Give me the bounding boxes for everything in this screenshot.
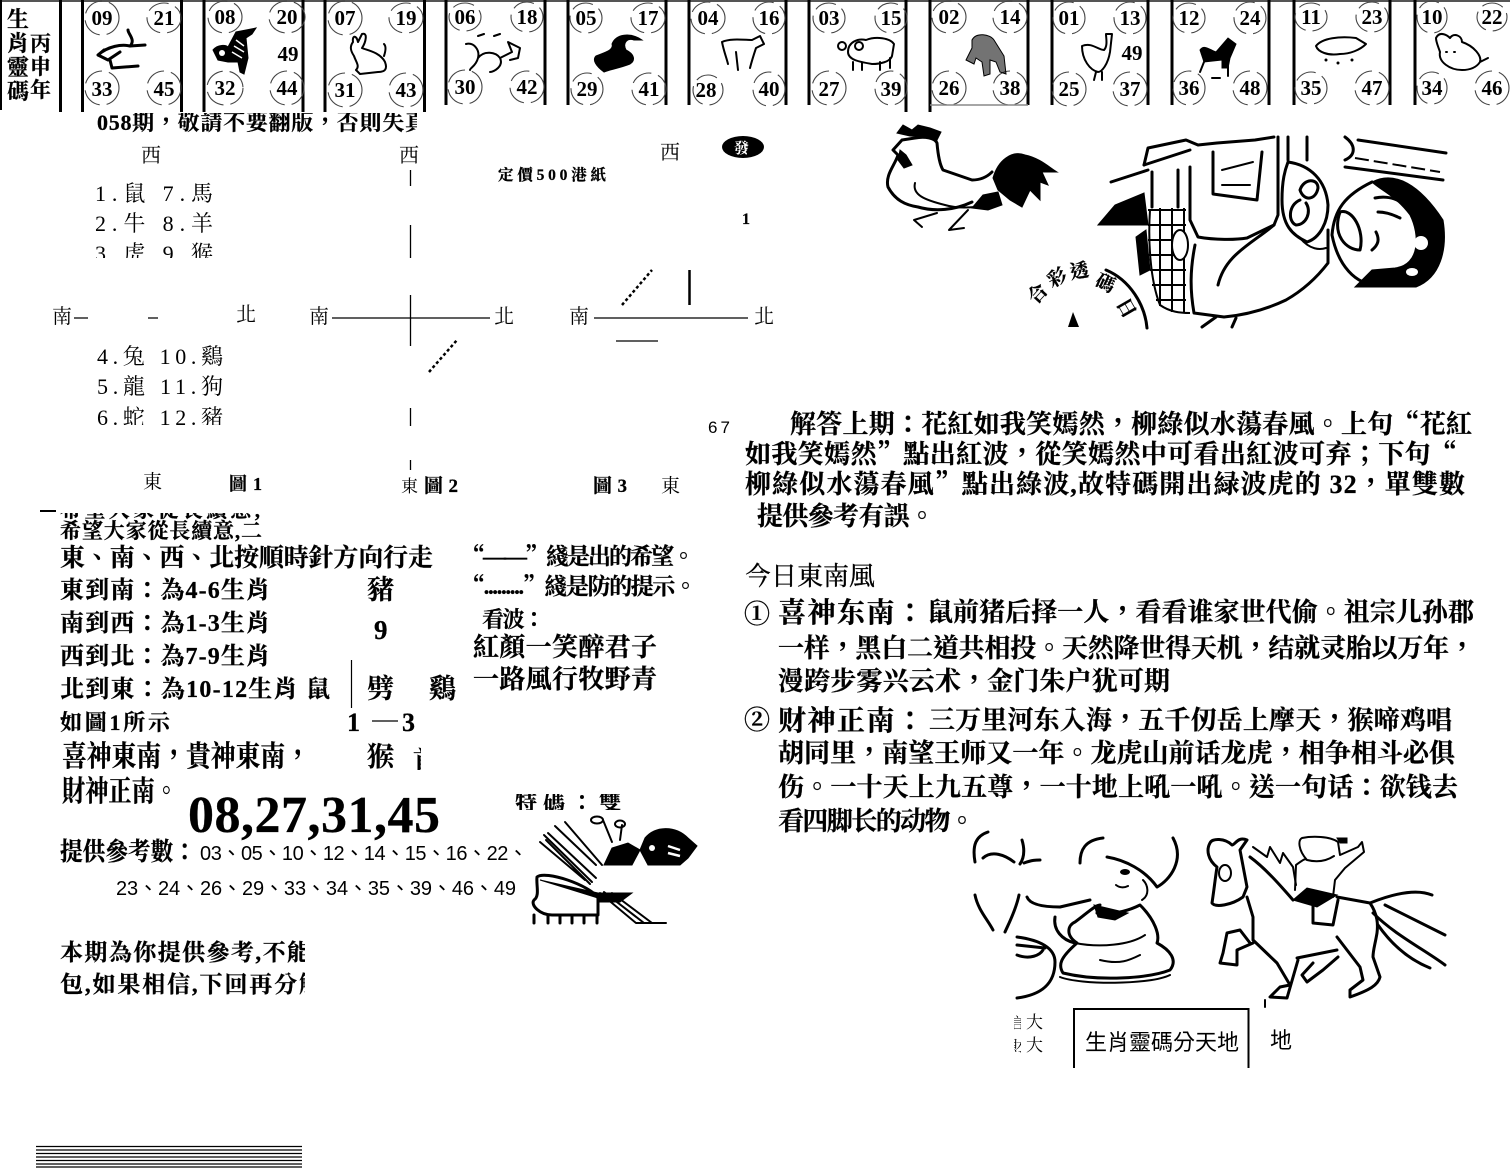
text block: wealth god south bbox=[744, 705, 1459, 836]
reference numbers: 23、24、26、29、33、34、35、39、46、49 bbox=[116, 878, 516, 900]
list: zodiac numbers upper: 1.鼠 7.馬 bbox=[95, 181, 213, 206]
closing note bbox=[60, 940, 322, 997]
icon: tiger bbox=[213, 28, 256, 74]
panel: horse 04: 28 bbox=[696, 78, 716, 102]
diagram: compass figures: 西 bbox=[660, 141, 680, 164]
title box: 生肖靈碼分天地 bbox=[1085, 1030, 1239, 1055]
list: zodiac numbers lower: 5.龍 11.狗 bbox=[97, 374, 223, 399]
list: zodiac numbers lower bbox=[97, 344, 223, 430]
legend: line meaning: “.........”綫是防的提示。 bbox=[462, 568, 697, 601]
diagram: compass figures bbox=[52, 141, 774, 497]
illustration: upside-down boy bbox=[1098, 137, 1446, 327]
reference numbers bbox=[60, 838, 528, 900]
panel: rooster 01: 25 bbox=[1058, 77, 1080, 101]
special code label: 特碼：雙 bbox=[515, 790, 621, 815]
text block: colour wave poem: 紅顏一笑醉君子 bbox=[473, 633, 657, 662]
fragments: side captions: 言 bbox=[1010, 1015, 1025, 1032]
diagram: compass figures: 北 bbox=[236, 303, 256, 326]
diagram: compass figures: 東 bbox=[661, 475, 680, 497]
panel: pig 11: 11 bbox=[1301, 5, 1321, 29]
text block: direction rules bbox=[60, 543, 433, 808]
panel: rat-row 09: 33 bbox=[92, 77, 112, 101]
list: zodiac numbers upper bbox=[96, 182, 212, 258]
icon: dog bbox=[1200, 38, 1236, 68]
panel: rat-row 09: 45 bbox=[154, 77, 174, 101]
panel: zodiac title: 生 bbox=[7, 7, 29, 32]
panel: dragon 06: 30 bbox=[454, 75, 476, 99]
text block: wealth god south: ② bbox=[744, 706, 770, 735]
text block: colour wave poem: 一路風行牧野青 bbox=[473, 665, 657, 694]
text block: last issue answer bbox=[745, 404, 1472, 531]
legend: line meaning: “——”綫是出的希望。 bbox=[462, 538, 695, 571]
text block: direction rules: 北到東：為10-12生肖 鼠 bbox=[60, 676, 330, 703]
text block: last issue answer: 提供參考有誤。 bbox=[757, 501, 935, 531]
panel: rooster 01 bbox=[1052, 0, 1148, 106]
panel: rabbit 07: 43 bbox=[396, 78, 416, 102]
text block: fortune god southeast bbox=[744, 597, 1475, 696]
text block: wealth god south: 财神正南： bbox=[778, 705, 924, 737]
panel: tiger 08 bbox=[204, 0, 305, 112]
panel: snake 05: 17 bbox=[638, 6, 658, 30]
text block: wealth god south: 三万里河东入海，五千仞岳上摩天，猴啼鸡唱 bbox=[929, 705, 1452, 735]
diagram: compass figures: 南 bbox=[52, 305, 72, 328]
icon: hen bbox=[1082, 34, 1112, 80]
text block: wealth god south: 看四脚长的动物。 bbox=[778, 806, 975, 836]
panel: tiger 08: 20 bbox=[276, 5, 298, 29]
fragments: side captions bbox=[1014, 1013, 1042, 1052]
icon: rabbit bbox=[351, 34, 386, 74]
list: zodiac numbers lower: 4.兔 10.鷄 bbox=[97, 344, 223, 369]
panel: rat-row 09: 09 bbox=[92, 6, 112, 30]
text block: wealth god south: 胡同里，南望王师又一年。龙虎山前话龙虎，相争相斗必俱 bbox=[778, 738, 1456, 768]
diagram: compass figures: 西 bbox=[399, 144, 419, 167]
text block: fortune god southeast: 漫跨步雾兴云术，金门朱户犹可期 bbox=[778, 667, 1170, 696]
illustration: drinking boy bbox=[974, 832, 1177, 998]
diagram: zodiac cross: 劈 bbox=[367, 674, 394, 704]
text block: last issue answer: 柳綠似水蕩春風”點出綠波,故特碼開出緑波虎的 32，單雙數 bbox=[745, 464, 1465, 501]
text block: last issue answer: 解答上期：花紅如我笑嫣然，柳綠似水蕩春風。上句“花紅 bbox=[790, 404, 1472, 441]
stamp: arc text: 彩 bbox=[1044, 264, 1071, 292]
panel: rooster 01: 37 bbox=[1120, 77, 1140, 101]
heading: issue notice: 058期，敬請不要翻版，否則失真 bbox=[97, 110, 430, 135]
diagram: zodiac cross bbox=[347, 575, 456, 774]
text block: direction rules: 東到南：為4-6生肖 bbox=[60, 576, 270, 604]
panel: dog 12: 48 bbox=[1240, 76, 1260, 100]
illustration: snail-eyed cartoon bbox=[533, 816, 697, 923]
panel: goat 03: 03 bbox=[818, 6, 840, 30]
icon: rat bbox=[1436, 34, 1488, 70]
panel: rooster 01: 13 bbox=[1120, 6, 1140, 30]
text block: colour wave poem bbox=[473, 607, 657, 694]
panel: zodiac title: 丙 bbox=[30, 32, 51, 56]
fragments: side captions: 大 bbox=[1026, 1013, 1043, 1032]
icon: snake bbox=[594, 35, 642, 72]
diagram: compass figures: 西 bbox=[141, 144, 161, 167]
icon: small black emblem: 發 bbox=[734, 139, 749, 157]
panel: rat 10: 46 bbox=[1482, 76, 1502, 100]
stamp: arc text: 碼 bbox=[1092, 270, 1118, 298]
panel: dog 12: 24 bbox=[1240, 6, 1261, 30]
stamp: arc text: 日 bbox=[1112, 295, 1139, 322]
panel: zodiac title bbox=[0, 0, 62, 112]
panel: zodiac title: 靈 bbox=[7, 55, 29, 80]
panel: zodiac title: 年 bbox=[30, 78, 51, 102]
panel: snake 05: 41 bbox=[638, 77, 660, 101]
icon: dragon bbox=[466, 34, 520, 72]
panel: rabbit 07: 31 bbox=[334, 78, 356, 102]
panel: snake 05: 05 bbox=[576, 6, 596, 30]
text block: fortune god southeast: ① bbox=[744, 600, 770, 629]
text block: wealth god south: 伤。一十天上九五尊，一十地上吼一吼。送一句话：欲钱去 bbox=[778, 772, 1459, 802]
text block: direction rules: 東、南、西、北按順時針方向行走 bbox=[60, 543, 433, 572]
panel: rooster 01: 01 bbox=[1058, 6, 1080, 30]
panel: goat 03 bbox=[809, 0, 907, 112]
panel: pig 11: 47 bbox=[1362, 76, 1382, 100]
panel: dog 12 bbox=[1172, 0, 1269, 105]
panel: monkey 02: 26 bbox=[938, 76, 960, 100]
diagram: zodiac cross: 猴 bbox=[367, 742, 396, 772]
stamp: arc text: 透 bbox=[1068, 258, 1092, 284]
panel: horse 04: 40 bbox=[758, 77, 780, 101]
diagram: zodiac cross: 首 bbox=[413, 747, 437, 774]
diagram: compass figures: 圖3 bbox=[593, 475, 627, 497]
list: zodiac numbers lower: 6.蛇 12.豬 bbox=[97, 405, 223, 430]
panel: zodiac title: 申 bbox=[30, 55, 51, 79]
diagram: compass figures: 東 bbox=[401, 477, 418, 496]
diagram: compass figures: 南 bbox=[569, 305, 589, 328]
panel: snake 05: 29 bbox=[576, 77, 598, 101]
panel: pig 11: 23 bbox=[1362, 5, 1382, 29]
icon: pig bbox=[1316, 37, 1366, 55]
heading: today's wind: 今日東南風 bbox=[745, 562, 875, 591]
stamp: arc text bbox=[1023, 258, 1147, 328]
text block: last issue answer: 如我笑嫣然”點出紅波，從笑嫣然中可看出紅波可弃；下句“ bbox=[745, 434, 1457, 471]
panel: dragon 06: 42 bbox=[516, 75, 538, 99]
panel: monkey 02: 14 bbox=[1000, 5, 1021, 29]
text block: direction rules: 如圖1所示 bbox=[60, 710, 172, 735]
panel: horse 04 bbox=[689, 0, 786, 106]
panel: rat 10: 34 bbox=[1422, 76, 1443, 100]
fragments: side captions: 大 bbox=[1026, 1036, 1043, 1055]
panel: pig 11 bbox=[1294, 0, 1390, 105]
panel: dragon 06: 06 bbox=[454, 5, 476, 29]
list: zodiac numbers upper: 3.虎 9.猴 bbox=[95, 241, 214, 266]
illustration: rooster bbox=[887, 125, 1057, 230]
diagram: zodiac cross: 豬 bbox=[367, 575, 394, 605]
diagram: compass figures: 圖2 bbox=[424, 475, 458, 497]
panel: rat 10: 22 bbox=[1482, 5, 1502, 29]
number 1: 1 bbox=[742, 211, 750, 228]
icon: small black emblem bbox=[722, 136, 764, 158]
diagram: compass figures: 圖1 bbox=[229, 474, 262, 494]
illustration: child on horse bbox=[1208, 837, 1445, 1007]
text block: intro clipped: 希望大家從長續意, bbox=[60, 498, 260, 522]
panel: rabbit 07: 19 bbox=[396, 6, 416, 30]
text block: intro clipped: 希望大家從長續意,二 bbox=[60, 519, 262, 543]
text block: fortune god southeast: 鼠前猪后择一人，看看谁家世代偷。祖宗儿孙郡 bbox=[927, 597, 1474, 627]
panel: rooster 01: 49 bbox=[1122, 41, 1142, 65]
diagram: compass figures: 南 bbox=[309, 305, 329, 328]
panel: zodiac title: 肖 bbox=[7, 31, 29, 56]
closing note: 包,如果相信,下回再分解 bbox=[60, 972, 322, 997]
panel: pig 11: 35 bbox=[1300, 76, 1322, 100]
reference numbers: 提供參考數： bbox=[60, 838, 196, 866]
closing note: 本期為你提供參考,不能 bbox=[60, 940, 310, 965]
price label: 定價500港紙 bbox=[498, 166, 606, 184]
panel: dog 12: 12 bbox=[1178, 6, 1200, 30]
diagram: zodiac cross: 9 bbox=[374, 615, 388, 645]
top border bbox=[0, 0, 1510, 2]
panel: horse 04: 04 bbox=[698, 6, 719, 30]
icon: monkey-like animal bbox=[98, 30, 145, 68]
diagram: compass figures: 北 bbox=[754, 305, 774, 328]
panel: goat 03: 15 bbox=[880, 6, 902, 30]
text block: direction rules: 南到西：為1-3生肖 bbox=[60, 609, 270, 637]
fragments: side captions: 財 bbox=[1010, 1038, 1025, 1055]
diagram: zodiac cross: 鷄 bbox=[429, 674, 456, 704]
diagram: zodiac cross: 1 bbox=[347, 708, 360, 737]
diagram: compass figures: 東 bbox=[143, 471, 162, 493]
panel: dragon 06: 18 bbox=[516, 5, 538, 29]
stamp: arc text: 合 bbox=[1023, 279, 1052, 308]
panel: monkey 02 bbox=[930, 0, 1028, 112]
panel: dragon 06 bbox=[446, 0, 545, 105]
panel: rat-row 09 bbox=[82, 0, 182, 112]
panel: monkey 02: 38 bbox=[1000, 76, 1020, 100]
left rule mark bbox=[40, 510, 56, 512]
panel: zodiac title: 碼 bbox=[7, 79, 29, 104]
text block: colour wave poem: 看波： bbox=[482, 607, 545, 632]
diagram: compass figures: 北 bbox=[494, 305, 514, 328]
panel: rat 10: 10 bbox=[1422, 5, 1442, 29]
page number 67: 67 bbox=[708, 418, 730, 437]
lucky numbers: 08,27,31,45 bbox=[188, 787, 440, 844]
panel: tiger 08: 08 bbox=[214, 5, 236, 29]
reference numbers: 03、05、10、12、14、15、16、22、 bbox=[200, 843, 528, 865]
panel: rat-row 09: 21 bbox=[154, 6, 174, 30]
icon: monkey bbox=[966, 35, 1006, 76]
text block: fortune god southeast: 喜神东南： bbox=[778, 597, 924, 629]
panel: monkey 02: 02 bbox=[938, 5, 960, 29]
panel: rat 10 bbox=[1415, 0, 1509, 105]
panel: rabbit 07 bbox=[325, 0, 424, 112]
panel: tiger 08: 32 bbox=[214, 76, 236, 100]
text block: direction rules: 喜神東南，貴神東南， bbox=[62, 740, 310, 773]
list: zodiac numbers upper: 2.牛 8.羊 bbox=[95, 211, 213, 236]
panel: tiger 08: 49 bbox=[278, 42, 298, 66]
text block: direction rules: 西到北：為7-9生肖 bbox=[60, 643, 270, 670]
bottom rules bbox=[36, 1146, 302, 1167]
panel: rabbit 07: 07 bbox=[334, 6, 356, 30]
title box bbox=[1074, 1009, 1248, 1068]
legend: line meaning bbox=[462, 538, 697, 601]
panel: goat 03: 27 bbox=[818, 77, 840, 101]
icon: ram bbox=[848, 38, 894, 70]
panel: goat 03: 39 bbox=[880, 77, 902, 101]
panel: horse 04: 16 bbox=[758, 6, 780, 30]
fragment: earth character: 地 bbox=[1270, 1028, 1292, 1053]
text block: fortune god southeast: 一样，黑白二道共相投。天然降世得天机，结就灵胎以万年， bbox=[778, 633, 1475, 663]
panel: dog 12: 36 bbox=[1178, 76, 1200, 100]
text block: direction rules: 財神正南。 bbox=[62, 775, 178, 808]
panel: snake 05 bbox=[568, 0, 666, 105]
icon: cow bbox=[722, 36, 764, 70]
panel: tiger 08: 44 bbox=[276, 76, 298, 100]
diagram: zodiac cross: 3 bbox=[402, 708, 415, 737]
